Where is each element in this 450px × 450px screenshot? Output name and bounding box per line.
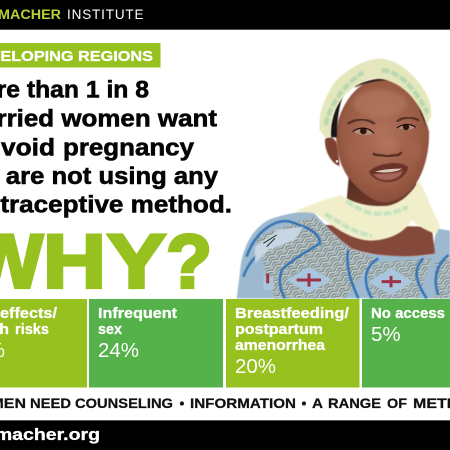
panel: breastfeeding: [226, 299, 360, 388]
panel: no access: [362, 299, 450, 388]
ear: [325, 137, 340, 166]
head scarf: [319, 59, 431, 137]
message line: NEED: [30, 395, 71, 411]
headline: pregnancy: [63, 134, 195, 162]
panel: infrequent sex: [89, 299, 223, 388]
panel: breastfeeding: postpartum: [235, 322, 323, 338]
photo: woman in headscarf: [237, 59, 450, 298]
panel: side effects: effects/: [0, 306, 57, 322]
message line: [0, 395, 450, 411]
why heading: [0, 220, 212, 304]
mouth: [369, 163, 408, 182]
chest skin: [325, 225, 435, 256]
dress: [237, 211, 450, 298]
panel: side effects: [0, 299, 87, 388]
panel: infrequent sex: sex: [98, 322, 122, 338]
message line: OF: [387, 395, 407, 411]
panel: breastfeeding: 20%: [235, 355, 276, 378]
why heading: Y: [107, 220, 166, 304]
headline: [0, 76, 232, 218]
message line: A: [312, 395, 323, 411]
message line: •: [180, 395, 184, 411]
panel: breastfeeding: Breastfeeding/: [235, 306, 349, 322]
message line: COUNSELING: [75, 395, 173, 411]
message line: RANGE: [328, 395, 381, 411]
panel: no access: 5%: [371, 323, 401, 346]
neck: [347, 173, 417, 230]
eyes and brows: [348, 118, 419, 135]
panel: infrequent sex: Infrequent: [98, 306, 177, 322]
message line: INFORMATION: [190, 395, 296, 411]
nose: [373, 138, 402, 157]
scarf pattern: [326, 70, 428, 125]
face: [331, 79, 429, 203]
logo: Guttmacher Institute: [0, 7, 144, 22]
why heading: ?: [166, 220, 212, 304]
logo: Guttmacher Institute: INSTITUTE: [67, 7, 144, 22]
why heading: H: [43, 220, 106, 304]
neck scarf: [293, 181, 440, 241]
tag: developing regions: [0, 43, 160, 68]
panel: infrequent sex: 24%: [98, 339, 139, 362]
panel: no access: No access: [371, 306, 445, 322]
header bar: [0, 0, 450, 30]
panel: breastfeeding: amenorrhea: [235, 338, 326, 354]
footer bar: [0, 420, 450, 450]
panel: side effects: risks: [15, 322, 49, 338]
headline: void: [1, 134, 55, 162]
message line: •: [302, 395, 306, 411]
